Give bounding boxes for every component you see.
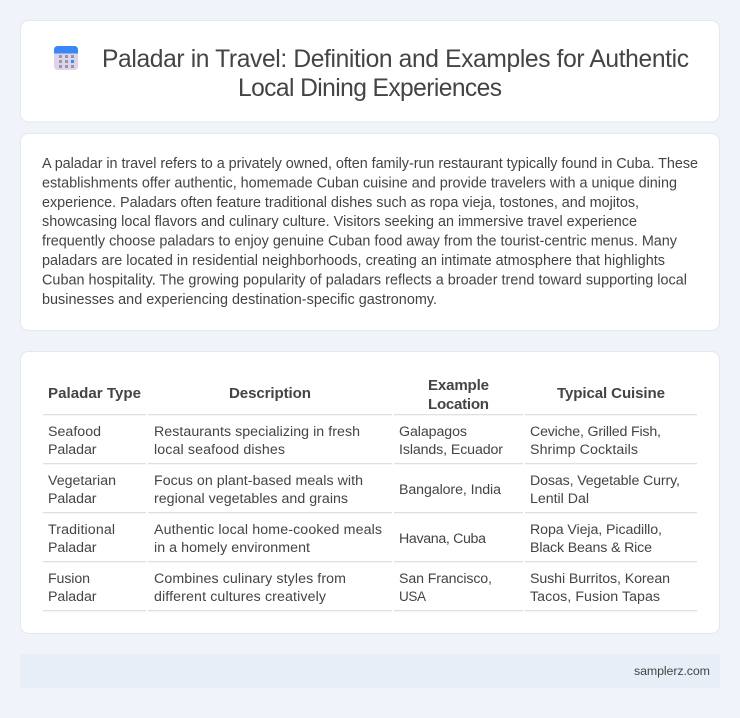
table row: seafood: Islands, Ecuador [399,442,503,458]
description text: paladars are located in residential neighborhoods, creating an intimate atmosphere that highlights [42,253,665,269]
table header: Location [428,396,489,413]
table row: vegetarian: Vegetarian [48,473,116,489]
title text: Paladar in Travel: Definition and Examples for Authentic [102,46,689,73]
table row: fusion: Fusion [48,571,90,587]
table row: fusion: Tacos, Fusion Tapas [530,589,660,605]
table row: seafood [48,424,661,458]
table row: vegetarian: Focus on plant-based meals with [154,473,363,489]
table row: fusion: different cultures creatively [154,589,327,605]
title text: Local Dining Experiences [238,75,502,102]
table row: fusion: Combines culinary styles from [154,571,346,587]
description text: businesses and experiencing destination-specific gastronomy. [42,292,437,308]
icon: calendar [54,46,78,70]
footer [20,654,720,688]
table row: traditional: Authentic local home-cooked meals [154,522,382,538]
table row: traditional: Paladar [48,540,97,556]
description text: A paladar in travel refers to a privately owned, often family-run restaurant typically found in Cuba. These [42,156,698,172]
table row: vegetarian: regional vegetables and grains [154,491,348,507]
table row: traditional: in a homely environment [154,540,310,556]
table row: traditional [48,522,662,556]
title text [102,46,689,102]
table row: traditional: Havana, Cuba [399,531,486,547]
table row: vegetarian [48,473,680,507]
table row: seafood: Paladar [48,442,97,458]
table row: vegetarian: Lentil Dal [530,491,589,507]
table row: vegetarian: Dosas, Vegetable Curry, [530,473,680,489]
table row: fusion: Paladar [48,589,97,605]
panel: table [20,352,720,634]
table row: fusion: San Francisco, [399,571,492,587]
table row: traditional: Ropa Vieja, Picadillo, [530,522,662,538]
table header: Paladar Type [48,385,141,402]
table header: Description [229,385,311,402]
table row: seafood: Shrimp Cocktails [530,442,638,458]
footer: samplerz.com [634,664,710,678]
panel: description [20,134,720,330]
panel: title [20,20,720,122]
table row: fusion: Sushi Burritos, Korean [530,571,670,587]
table row: seafood: Seafood [48,424,101,440]
description text: showcasing local flavors and culinary culture. Visitors seeking an immersive travel experience [42,214,637,230]
description text: Cuban hospitality. The growing popularity of paladars reflects a broader trend toward supporting local [42,272,687,288]
table row: seafood: Ceviche, Grilled Fish, [530,424,661,440]
table rules [43,414,697,611]
table row: seafood: Restaurants specializing in fresh [154,424,360,440]
description text: experience. Paladars often feature traditional dishes such as ropa vieja, tostones, and mojitos, [42,195,639,211]
table row: vegetarian: Paladar [48,491,97,507]
table header: Example [428,377,489,394]
table row: seafood: local seafood dishes [154,442,285,458]
table row: vegetarian: Bangalore, India [399,482,501,498]
table header: Typical Cuisine [557,385,665,402]
table row: seafood: Galapagos [399,424,467,440]
table row: fusion [48,571,670,605]
table row: fusion: USA [399,589,426,604]
description text: frequently choose paladars to enjoy genuine Cuban food away from the tourist-centric menus. Many [42,234,678,250]
table row: traditional: Traditional [48,522,115,538]
description text: establishments offer authentic, homemade Cuban cuisine and provide travelers with a unique dining [42,175,677,191]
description text [42,156,698,308]
table row: traditional: Black Beans & Rice [530,540,652,556]
table header [48,377,665,413]
